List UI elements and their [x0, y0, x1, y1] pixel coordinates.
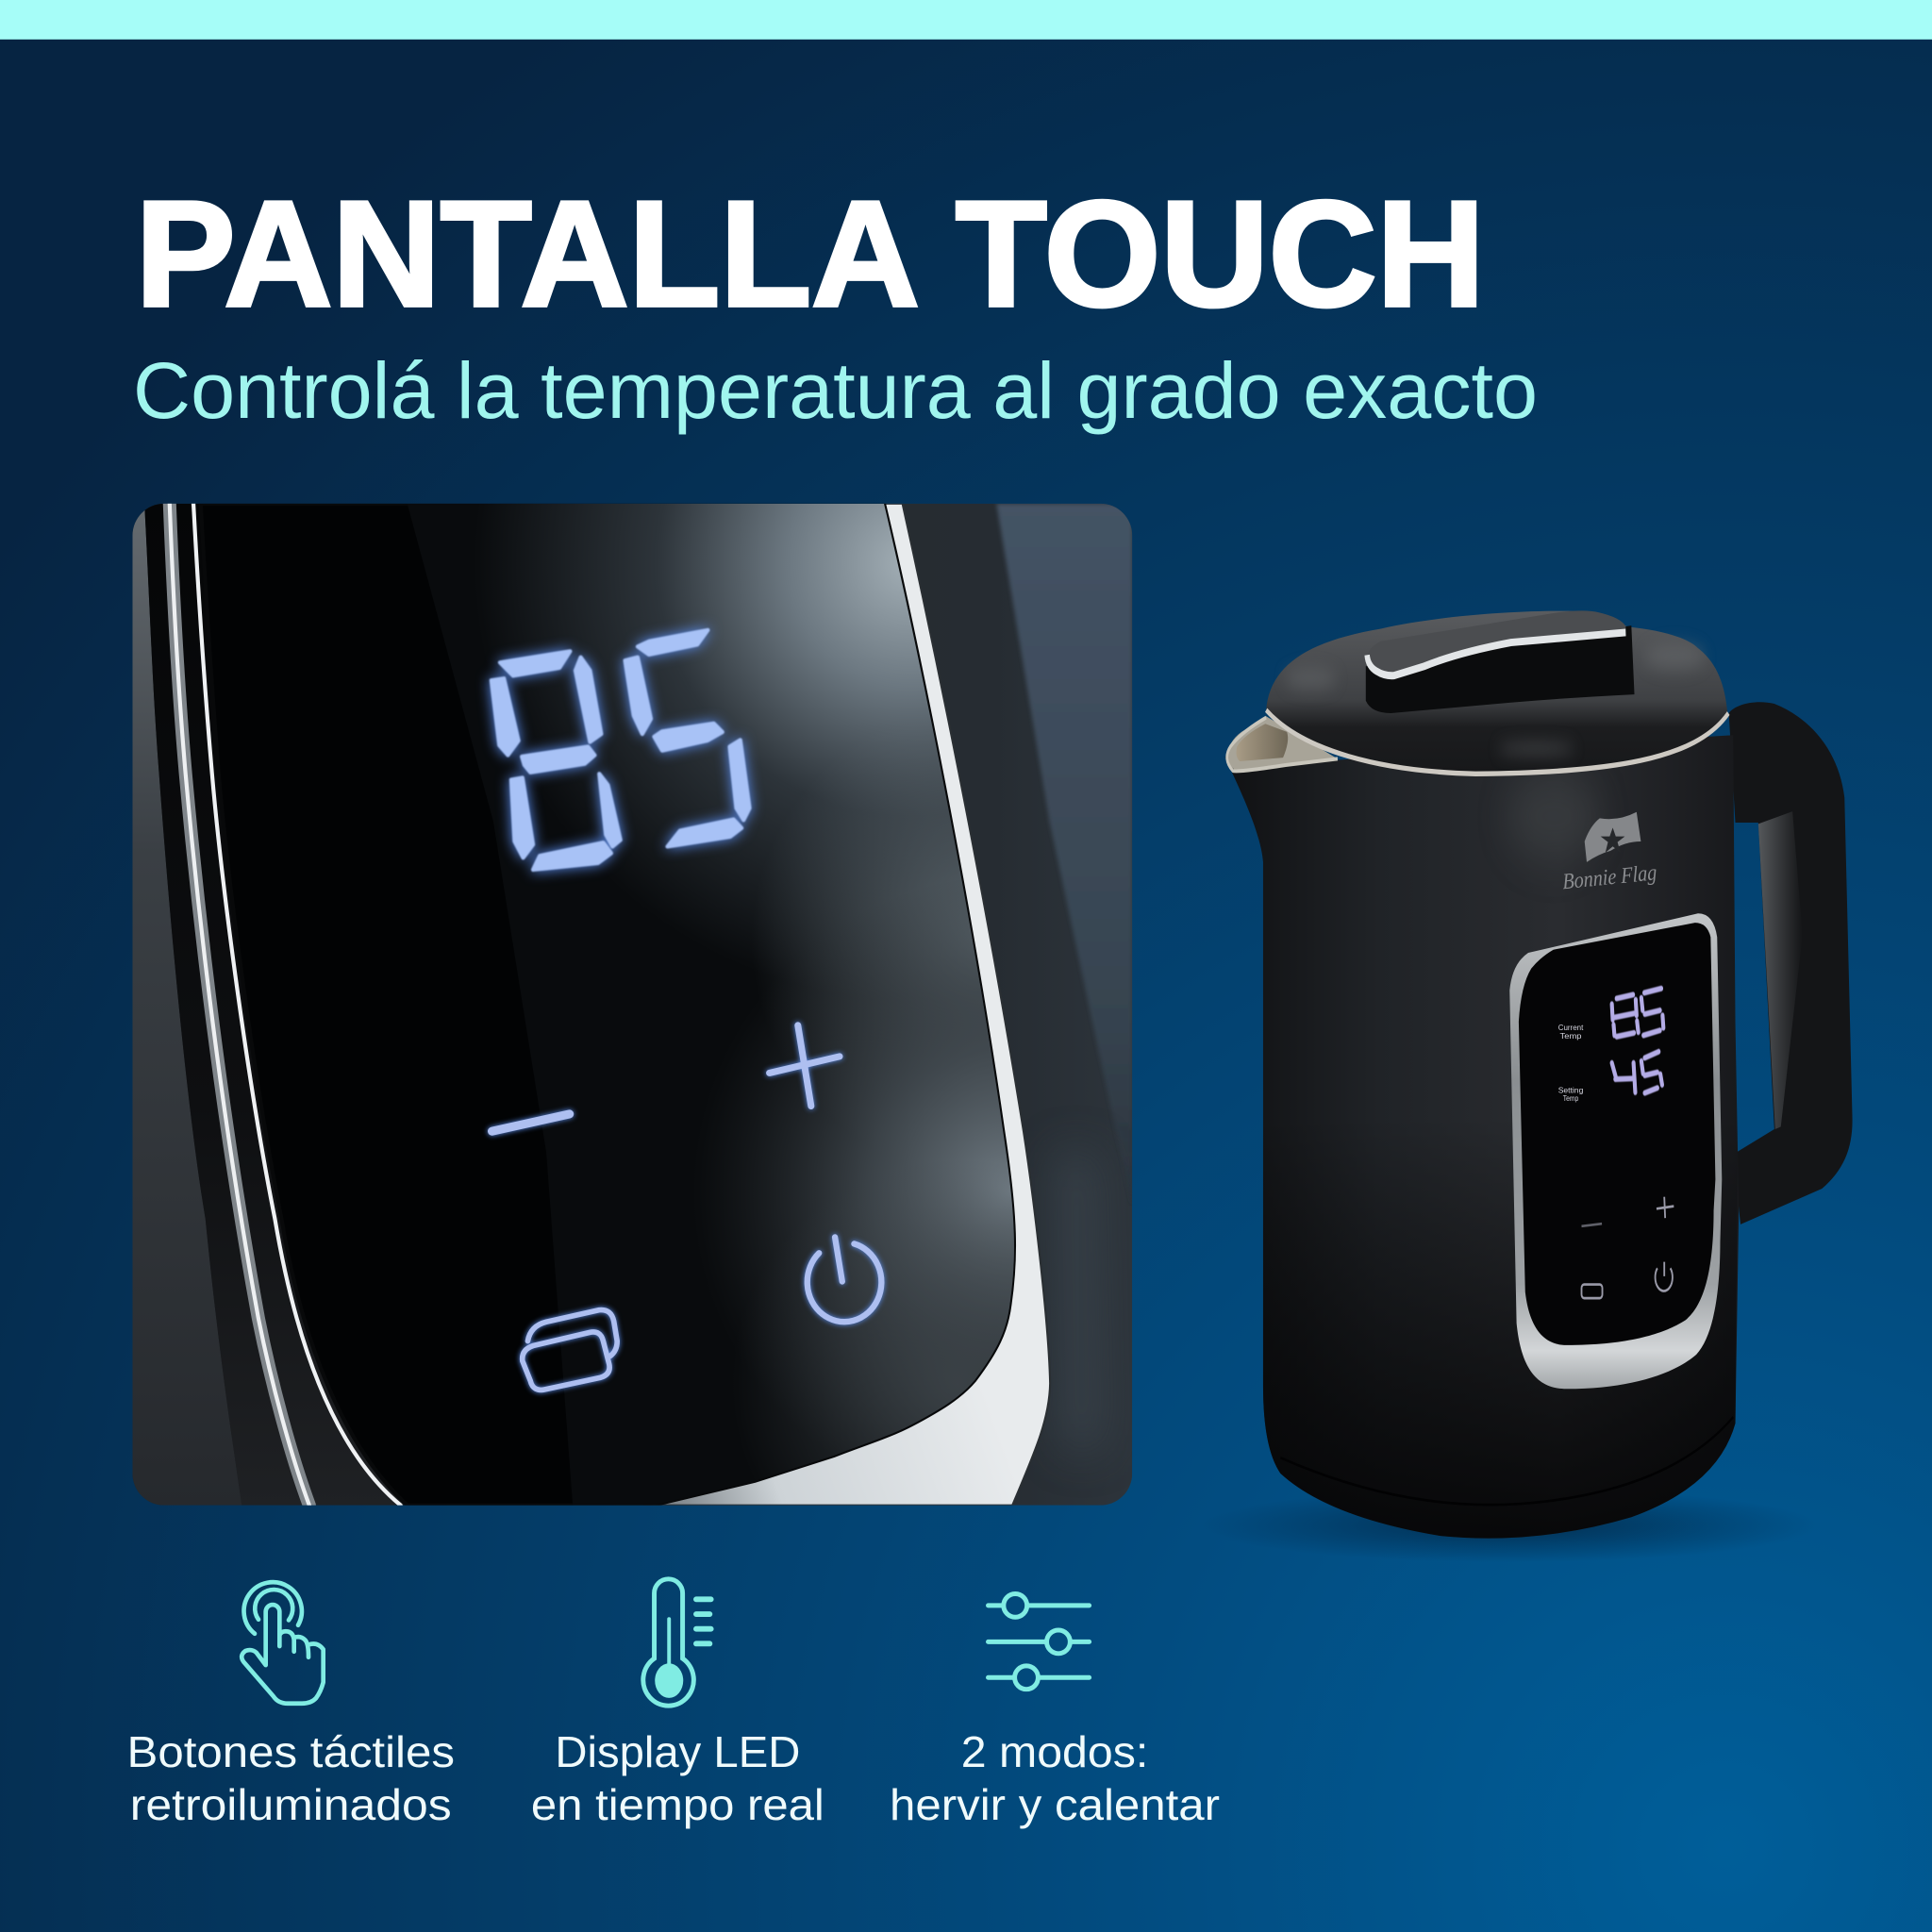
middle edge sheen [730, 919, 1014, 1398]
outer trim highlight [170, 504, 309, 1506]
feature: touch buttons [127, 1582, 455, 1829]
outer trim body [170, 504, 309, 1506]
knob top [1368, 610, 1625, 675]
logo text: Bonnie Flag [1562, 861, 1657, 894]
feature: LED display [531, 1579, 824, 1829]
body highlight [1506, 773, 1601, 860]
knob base [1366, 625, 1635, 713]
lid knob [1366, 610, 1635, 713]
touch icons on display [492, 1025, 881, 1390]
panel body backdrop [132, 504, 1132, 1506]
digits 85 [1612, 989, 1663, 1037]
label: two modes: hervir y calentar [890, 1780, 1220, 1829]
spout metal [1226, 716, 1338, 772]
handle inner side [1758, 811, 1803, 1129]
silver bezel [645, 504, 1050, 1506]
body lower shade [1263, 1117, 1738, 1539]
upper edge sheen [774, 767, 999, 1103]
lower edge sheen [766, 1202, 1013, 1470]
glass reflections [408, 504, 1049, 1510]
feature: two modes [890, 1593, 1220, 1829]
label: LED display: Display LED [555, 1727, 800, 1776]
logo flag [1585, 812, 1641, 862]
right side reflection [996, 504, 1132, 1206]
spout lip [1227, 718, 1338, 771]
kettle product [1225, 610, 1853, 1539]
plus button [770, 1025, 840, 1106]
touch panel silver bezel [1509, 913, 1722, 1389]
icon: thermometer [643, 1579, 711, 1706]
kettle lid [1266, 611, 1727, 773]
icon: sliders [989, 1593, 1090, 1690]
lid silver rim [1266, 710, 1728, 774]
mini minus button [1581, 1224, 1602, 1226]
kettle body [1225, 735, 1739, 1539]
kettle handle [1729, 702, 1853, 1224]
knob chrome edge [1367, 632, 1625, 675]
mini plus button [1657, 1197, 1674, 1218]
label: touch buttons: retroiluminados [130, 1780, 452, 1829]
left metal strip [132, 504, 242, 1506]
icon: hand touch [242, 1582, 324, 1704]
top sheen [408, 504, 964, 1504]
kettle shadow [1201, 1489, 1818, 1562]
black glass screen [201, 504, 1014, 1506]
subtitle: Controlá la temperatura al grado exacto [133, 345, 1538, 435]
mini mode button [1581, 1285, 1603, 1298]
small label 2 second line: Temp [1563, 1093, 1578, 1104]
label: touch buttons: Botones táctiles [127, 1727, 455, 1776]
label: two modes: 2 modos: [961, 1727, 1148, 1776]
small label 2: Setting [1558, 1085, 1583, 1095]
panel: touch display close-up [132, 504, 1132, 1510]
power button [808, 1237, 881, 1322]
right body streak [1056, 1164, 1100, 1440]
label: LED display: en tiempo real [531, 1780, 824, 1829]
top accent band [0, 0, 1932, 40]
minus button [492, 1114, 570, 1131]
logo star [1601, 827, 1624, 853]
dark channel beside glass [145, 504, 317, 1368]
small label 1: Current [1558, 1023, 1583, 1033]
title: PANTALLA TOUCH [136, 170, 1485, 338]
lid top highlights [1285, 644, 1705, 755]
mode button [523, 1310, 617, 1390]
small label 1 second line: Temp [1560, 1031, 1581, 1041]
digits 45 [1612, 1052, 1662, 1093]
inner trim line [193, 504, 401, 1506]
spout inner metal [1236, 724, 1288, 761]
base seam [1280, 1417, 1733, 1505]
silver trim lines left [170, 504, 401, 1506]
display digits 85 [491, 630, 750, 870]
mini power button [1656, 1262, 1673, 1291]
touch panel screen [1519, 923, 1715, 1345]
